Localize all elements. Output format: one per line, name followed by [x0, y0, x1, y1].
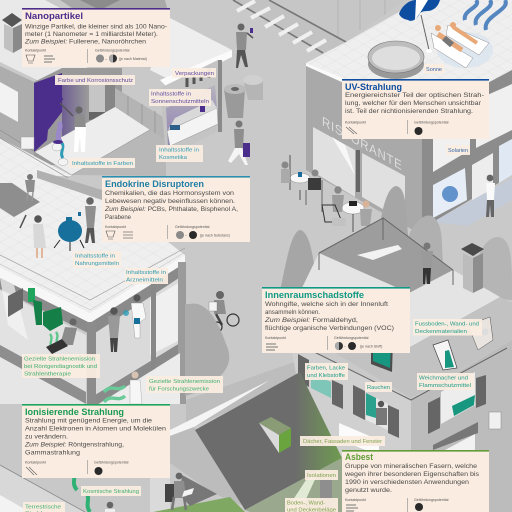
paint vapours [52, 122, 68, 166]
label: Weichmacher [417, 373, 474, 390]
hazard: Gefährdungspotential [414, 120, 449, 124]
label: Farben Lacke: und Klebstoffe [307, 373, 345, 379]
description: Anzahl Elektronen in Atomen und Molekülen [25, 426, 166, 432]
cafe table group 1 [281, 155, 322, 212]
low building wall [115, 88, 165, 150]
label: Kosmische Strahlung: Kosmische Strahlung [83, 489, 139, 495]
label: Kosmetika: Inhaltsstoffe in [159, 148, 199, 154]
label: Weichmacher: Flammschutzmittel [419, 383, 471, 389]
doctor and patient [108, 294, 146, 352]
label: Inhaltsstoffe in Farben: Inhaltsstoffe in Farben [72, 161, 133, 167]
label: Sonne [424, 64, 444, 74]
lower house walls [245, 458, 342, 512]
green x-ray machine [28, 288, 63, 349]
balcony building [296, 218, 500, 350]
label: Nahrungsmittel: Inhaltsstoffe in [75, 254, 115, 260]
waste bins [224, 75, 263, 118]
hazard: (je nach Material) [119, 57, 147, 61]
sunbathers [431, 22, 493, 68]
description: 1990 in verschiedensten Anwendungen [345, 479, 469, 486]
heading: Nanopartikel [25, 11, 83, 21]
contact: Kontaktpunkt [265, 336, 286, 340]
label: Terrestrische [23, 502, 65, 512]
hazard: Gefährdungspotential [414, 498, 449, 502]
description [24, 23, 167, 46]
description: Strahlung mit genügend Energie, um die [25, 418, 152, 424]
label: Kosmetika: Kosmetika [159, 155, 188, 161]
heading: Endokrine Disruptoren [105, 179, 204, 189]
patient [46, 318, 77, 354]
label: Kosmische Strahlung [81, 486, 141, 496]
description [24, 418, 166, 456]
heading: Innenraumschadstoffe [265, 290, 364, 300]
description [264, 301, 394, 332]
window: smoking [353, 385, 399, 438]
person: painter [54, 96, 86, 152]
hazard: Gefährdungspotential [175, 225, 210, 229]
label: Rauchen: Rauchen [367, 385, 390, 391]
description: Gammastrahlung [25, 450, 80, 456]
umbrella [399, 0, 440, 53]
hazard [414, 120, 449, 135]
panel: Nanopartikel [22, 8, 170, 67]
cyclist [209, 291, 239, 332]
description [344, 463, 480, 494]
house roof [195, 372, 342, 510]
hazard [175, 225, 230, 239]
wall with purple paint [0, 66, 122, 165]
description: zu verändern. [25, 434, 68, 440]
icon: blue grill [54, 217, 84, 251]
label: Nahrungsmittel [73, 251, 121, 268]
panel: Asbest [342, 450, 489, 512]
panel: Ionisierende Strahlung [22, 404, 170, 478]
window: paints [298, 354, 343, 409]
chimney right [461, 243, 484, 293]
label: Isolationen: Isolationen [307, 473, 336, 479]
label: Forschungszwecke: für Forschungszwecke [149, 386, 209, 392]
label: Sonnenschutz: Inhaltsstoffe in [151, 92, 191, 98]
contact [345, 498, 366, 511]
table [0, 183, 40, 228]
uv rays [465, 0, 506, 30]
back building top [272, 0, 405, 42]
label: Forschungszwecke [146, 376, 223, 393]
contact [25, 460, 46, 475]
label: Dächer [300, 436, 385, 446]
researcher [104, 372, 142, 404]
label: Inhaltsstoffe in Farben [69, 158, 135, 168]
label: Boden [285, 498, 338, 512]
contact [25, 48, 55, 63]
heading: Ionisierende Strahlung [25, 407, 124, 417]
person with shopping bag [228, 120, 250, 165]
hazard: – [105, 57, 107, 61]
description: Winzige Partikel, die kleiner sind als 100 Nano- [25, 23, 167, 30]
trees [278, 186, 512, 300]
description: ist. Teil der nichtionisierenden Strahlung. [345, 108, 473, 115]
label: Röntgendiagnostik [22, 354, 100, 378]
bottom right building [250, 297, 512, 512]
contact [345, 120, 366, 134]
railway tracks [233, 0, 346, 53]
label: Arzneimittel [125, 268, 168, 284]
man at the tanning salon [476, 175, 495, 217]
person with phone [236, 24, 253, 68]
lower wall right column [150, 427, 248, 512]
cafe table group 2 [322, 186, 372, 232]
pool [368, 41, 424, 79]
label: Farben Lacke [305, 363, 348, 380]
ristorante facade [306, 66, 422, 235]
panel: Endokrine Disruptoren [102, 176, 250, 242]
label: Arzneimittel: Inhaltsstoffe in [126, 270, 166, 276]
contact: Kontaktpunkt [105, 225, 126, 229]
panel: UV-Strahlung [342, 79, 489, 139]
person: woman at grill [33, 215, 46, 258]
hazard: Gefährdungspotential [94, 460, 129, 464]
person left terrace [25, 174, 35, 201]
heading: Asbest [345, 452, 373, 462]
description: lung, welcher für den Menschen unsichtbar [345, 100, 482, 107]
grey blob tree [185, 303, 229, 396]
description: wegen ihrer besonderen Eigenschaften bis [344, 471, 480, 478]
description: Chemikalien, die das Hormonsystem von [105, 190, 234, 197]
chimney left [2, 13, 22, 53]
description: Wohngifte, welche sich in der Innenluft [265, 301, 388, 308]
description: Lebewesen negativ beeinflussen können. [105, 198, 235, 205]
description: flüchtige organische Verbindungen (VOC) [265, 325, 394, 332]
label: Arzneimittel: Arzneimitteln [126, 278, 163, 284]
description: Gruppe von mineralischen Fasern, welche [345, 463, 477, 470]
label: Röntgendiagnostik: Strahlentherapie [24, 372, 71, 378]
contact [105, 225, 133, 239]
hazard: – [344, 344, 346, 348]
description: Zum Beispiel: Röntgenstrahlung, [24, 442, 124, 448]
sign text: RISTORANTE [322, 113, 402, 174]
hazard [94, 460, 129, 475]
label: Terrestrische: Terrestrische [25, 504, 61, 510]
label: Röntgendiagnostik: bei Röntgendiagnostik und [24, 364, 97, 370]
label: Solarien [446, 145, 470, 155]
hazard: – [185, 234, 187, 238]
label: Farbe und Korrosionsschutz [55, 75, 135, 85]
label: Fussboden [413, 319, 482, 336]
contact: Kontaktpunkt [345, 498, 366, 502]
building 1 roof [0, 0, 170, 90]
label: Forschungszwecke: Gezielte Strahlenemission [149, 379, 220, 385]
description: Zum Beispiel: PCBs, Phthalate, Bisphenol A, [104, 206, 238, 213]
window top dormer [371, 340, 393, 372]
description: genutzt wurde. [345, 487, 392, 494]
description [345, 92, 484, 115]
shop shelves [167, 100, 218, 146]
description: Zum Beispiel: Formaldehyd, [264, 317, 358, 324]
label: Verpackungen: Verpackungen [175, 71, 214, 77]
description: Zum Beispiel: Fullerene, Nanoröhrchen [24, 38, 146, 46]
label: Rauchen [365, 382, 392, 392]
lower rooms [0, 262, 186, 512]
lower left roof [0, 404, 170, 512]
hazard: (je nach Substanz) [200, 234, 230, 238]
label: Sonnenschutz [149, 89, 211, 106]
label: Dächer: Dächer, Fassaden und Fenster [303, 439, 382, 445]
label: Fussboden: Deckenmaterialien [415, 329, 467, 335]
street band [170, 360, 300, 436]
hazard: Gefährdungspotential [334, 336, 369, 340]
cosmic rays and man [72, 470, 115, 512]
roof dormer [259, 417, 291, 453]
heading: UV-Strahlung [345, 82, 402, 92]
terrace big (tile floor) [0, 170, 185, 323]
label: Farben Lacke: Farben, Lacke [307, 366, 345, 372]
ristorante building roof [306, 0, 512, 118]
hazard [414, 498, 449, 511]
woman reading [165, 473, 194, 510]
hazard [95, 48, 147, 62]
contact: Kontaktpunkt [25, 48, 46, 52]
hazard [334, 336, 382, 350]
window: plasticisers [428, 372, 501, 434]
label: Farbe und Korrosionsschutz: Farbe und Korrosionsschutz [58, 78, 133, 84]
label: Röntgendiagnostik: Gezielte Strahlenemission [24, 356, 95, 362]
description: Parabene [105, 214, 131, 221]
hazard: Gefährdungspotential [95, 48, 130, 52]
label: Isolationen [305, 470, 338, 480]
person: man at grill [78, 197, 96, 243]
label: Weichmacher: Weichmacher und [419, 376, 468, 382]
label: Boden: Boden-, Wand- [287, 500, 325, 506]
label: Verpackungen [172, 68, 216, 78]
dormers right [433, 317, 493, 370]
label: Kosmetika [156, 145, 203, 162]
label: Solarien: Solarien [448, 148, 468, 154]
panel: Innenraumschadstoffe [262, 287, 410, 353]
right facade [422, 70, 512, 235]
label: Sonne: Sonne [426, 67, 442, 73]
person on balcony [421, 242, 433, 284]
description: meter (1 Nanometer = 1 milliardstel Meter). [25, 31, 158, 38]
contact: Kontaktpunkt [25, 460, 46, 464]
contact [265, 336, 286, 350]
garage door [339, 422, 478, 455]
hazard: (je nach Stoff) [360, 344, 382, 348]
description: Energiereichster Teil der optischen Strah- [345, 92, 484, 99]
description [104, 190, 238, 221]
shop [150, 18, 232, 158]
white terrace with painter [21, 96, 166, 176]
contact: Kontaktpunkt [345, 120, 366, 124]
label: Fussboden: Fussboden-, Wand- und [415, 322, 479, 328]
label: Nahrungsmittel: Nahrungsmitteln [75, 261, 119, 267]
label: Sonnenschutz: Sonnenschutzmitteln [151, 99, 209, 105]
description: ansammeln können. [265, 309, 320, 316]
tile floor left [0, 130, 72, 178]
